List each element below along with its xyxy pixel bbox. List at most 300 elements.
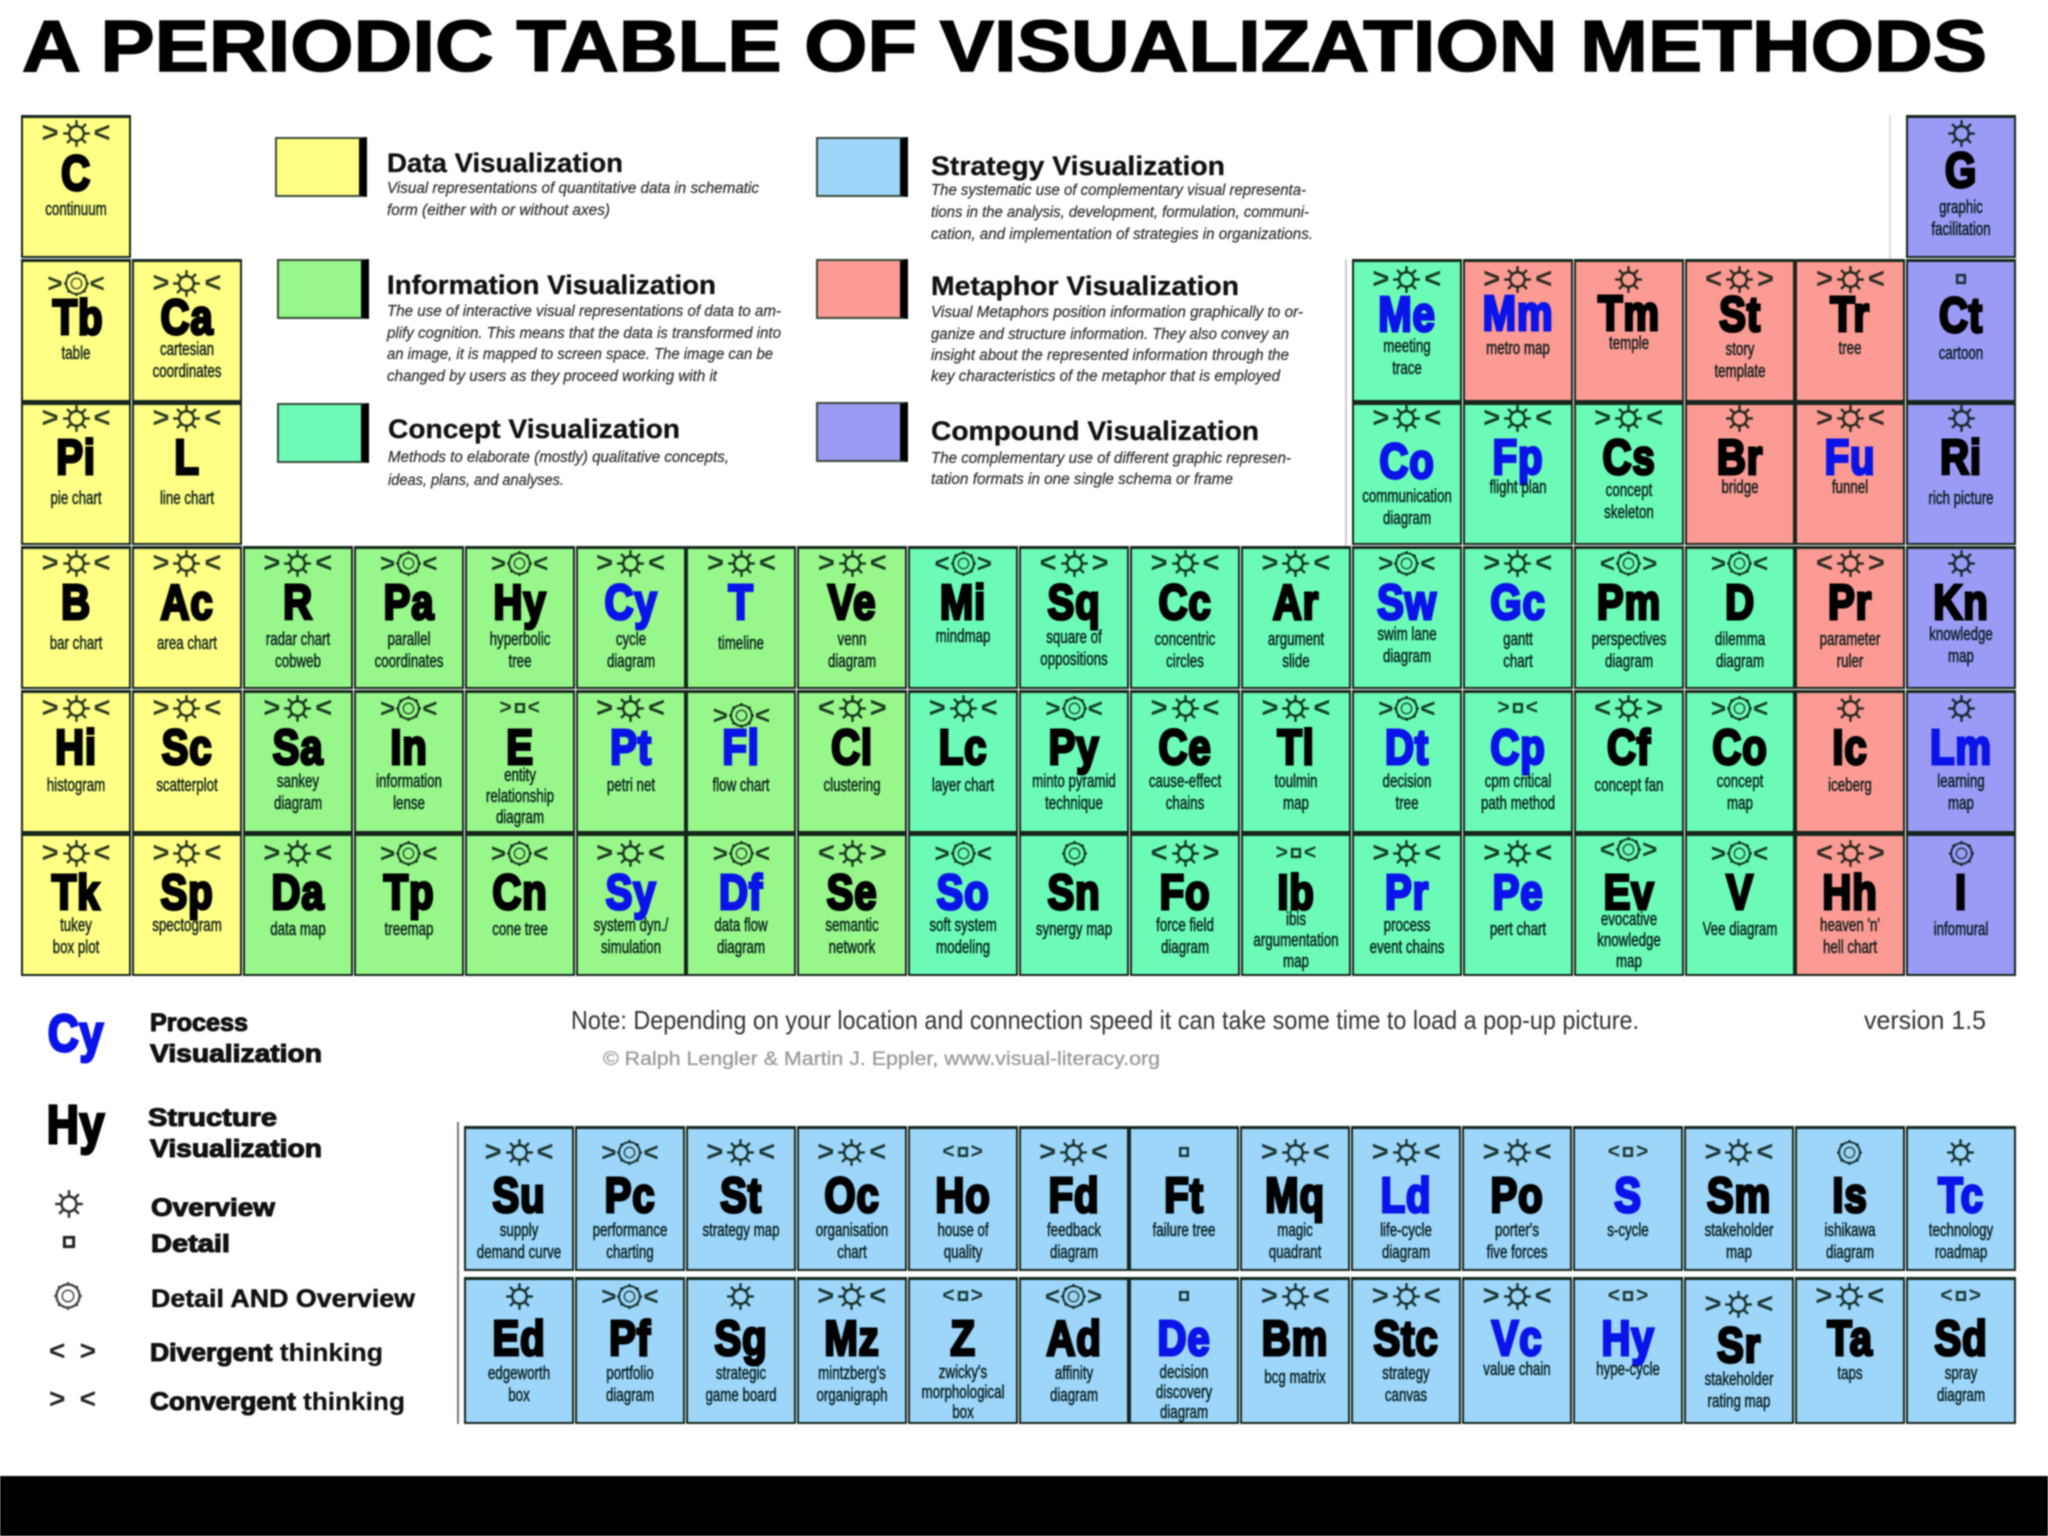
cell: Stc strategy canvas: canvas [1385,1385,1427,1405]
cell: Sr stakeholder rating map: > < [1704,1288,1773,1320]
cell: Sq square of oppositions: < > [1040,547,1109,579]
cell: Fu funnel [1795,402,1905,545]
cell: St story template: < > [1705,263,1774,295]
cell: Ib ibis argumentation map: Ib [1277,866,1315,920]
cell: Ic iceberg [1795,690,1905,833]
cell: Dt decision tree: > < [1378,693,1435,723]
cell: Tr tree: Tr [1831,288,1870,342]
legend text: information visualization: plify cognition. This means that the data is transformed into [386,325,781,342]
cell: I infomural: infomural [1934,919,1989,939]
cell: Ct cartoon: cartoon [1939,343,1984,363]
cell: Sr stakeholder rating map: rating map [1707,1391,1770,1411]
cell: St story template: story [1725,339,1754,359]
cell: Ft failure tree [1129,1126,1239,1271]
cell: Me meeting trace: meeting [1383,336,1430,356]
cell: Cs concept skeleton [1574,402,1684,545]
cell: Pm perspectives diagram: Pm [1596,576,1661,630]
cell: Z zwicky's morphological box: < > [942,1284,983,1307]
cell: Tl toulmin map [1241,690,1351,833]
cell: Gc gantt chart: chart [1503,651,1532,671]
cell: Sd spray diagram: diagram [1937,1385,1985,1405]
cell: Kn knowledge map: Kn [1934,576,1989,630]
cell: Mm metro map [1463,259,1573,402]
cell: Pf portfolio diagram [575,1277,685,1424]
cell: Sm stakeholder map [1684,1126,1794,1271]
cell: De decision discovery diagram [1129,1277,1239,1424]
cell: Sc scatterplot: > < [152,692,221,724]
cell: Fl flow chart: flow chart [713,775,770,795]
cell: Cc concentric circles: circles [1166,651,1204,671]
cell: Bm bcg matrix: Bm [1262,1312,1328,1366]
cell: Ad affinity diagram: diagram [1049,1385,1098,1405]
cell: Sa sankey diagram: > < [263,692,332,724]
cell: Ta taps [1795,1277,1905,1424]
cell: Ar argument slide: Ar [1273,576,1319,630]
cell: Oc organisation chart: > < [817,1136,886,1168]
cell: Py minto pyramid technique: technique [1045,793,1103,813]
cell: L line chart [132,402,242,545]
cell: Sy system dyn. simulation: > < [596,837,665,869]
cell: Hi histogram: > < [42,692,110,724]
cell: Pa parallel coordinates: > < [380,548,437,578]
cell: So soft system modeling: soft system [930,915,997,935]
cell: Ca cartesian coordinates: Ca [160,291,213,345]
cell: G graphic facilitation: G [1945,144,1977,198]
key: divergent thinking arrows: < > [49,1335,96,1366]
legend text: metaphor visualization: Visual Metaphors position information graphically to or- [931,304,1303,321]
cell: Co communication diagram: Co [1379,435,1434,489]
cell: Mz mintzberg's organigraph: organigraph [816,1385,887,1405]
cell: Vc value chain: value chain [1483,1359,1551,1379]
cell: Z zwicky's morphological box: morphological [921,1382,1004,1402]
cell: Ho house of quality: house of [937,1220,988,1240]
cell: L line chart: L [174,431,200,485]
cell: Ad affinity diagram: < > [1045,1281,1102,1311]
cell: Dt decision tree: tree [1395,793,1418,813]
cell: C continuum: continuum [45,199,107,219]
cell: Ce cause-effect chains: > < [1151,692,1219,724]
cell: Tm temple: Tm [1598,287,1660,341]
cell: Gc gantt chart: gantt [1503,629,1532,649]
cell: Hh heaven n hell chart: heaven 'n' [1820,915,1880,935]
cell: So soft system modeling: > < [934,838,992,868]
cell: Me meeting trace: > < [1372,263,1441,295]
cell: Vc value chain [1462,1277,1572,1424]
cell: Mi mindmap: mindmap [936,626,991,646]
icon: detail and overview [53,1281,83,1311]
cell: Bm bcg matrix: > < [1261,1280,1330,1312]
legend text: strategy visualization: The systematic use of complementary visual representa- [931,182,1306,199]
cell: Mq magic quadrant [1240,1126,1350,1271]
cell: Ca cartesian coordinates [132,259,242,402]
cell: Hi histogram: Hi [55,721,97,775]
cell: Cs concept skeleton: Cs [1602,431,1655,485]
legend text: information visualization: changed by users as they proceed working with it [387,368,718,385]
cell: Tk tukey box plot: Tk [52,866,100,920]
cell: Se semantic network: network [829,937,876,957]
cell: Po porter's five forces: porter's [1495,1220,1539,1240]
cell: Z zwicky's morphological box: Z [950,1312,975,1366]
cell: Dt decision tree: decision [1382,771,1431,791]
cell: Pt petri net: petri net [606,775,655,795]
cell: S s-cycle [1573,1126,1683,1271]
cell: Ac area chart [132,546,242,689]
cell: B bar chart: B [61,576,91,630]
cell: Sy system dyn. simulation [576,833,686,976]
cell: Ar argument slide [1241,546,1351,689]
cell: De decision discovery diagram: diagram [1160,1402,1208,1422]
cell: Fp flight plan: Fp [1492,431,1543,485]
cell: Su supply demand curve: demand curve [477,1242,561,1262]
key: detail and overview: Detail AND Overview [151,1285,416,1313]
key: structure visualization: Visualization [150,1135,322,1163]
cell: Fp flight plan: flight plan [1489,477,1546,497]
cell: Me meeting trace [1352,259,1462,402]
cell: Sm stakeholder map: > < [1704,1136,1773,1168]
cell: Tk tukey box plot: > < [42,837,110,869]
cell: Mi mindmap [908,546,1018,689]
cell: St story template [1684,259,1794,402]
cell: Po porter's five forces [1462,1126,1572,1271]
cell: Mm metro map: > < [1483,263,1552,295]
cell: Stc strategy canvas: strategy [1382,1363,1430,1383]
cell: Co communication diagram: communication [1362,486,1452,506]
cell: B bar chart: > < [42,547,110,579]
cell: Fp flight plan: > < [1483,402,1552,434]
cell: Co communication diagram [1352,402,1462,545]
cell: Ct cartoon: Ct [1939,289,1983,343]
cell: Gc gantt chart: Gc [1490,576,1545,630]
cell: Fd feedback diagram [1018,1126,1128,1271]
cell: Sn synergy map: Sn [1048,866,1101,920]
black bottom band [0,1476,2048,1536]
cell: De decision discovery diagram: discovery [1156,1382,1213,1402]
cell: Sa sankey diagram: Sa [272,721,323,775]
cell: Sa sankey diagram: sankey [277,771,319,791]
cell: Se semantic network: Se [827,866,878,920]
cell: Ld life-cycle diagram: > < [1372,1136,1441,1168]
cell: Hy hype-cycle: Hy [1601,1312,1654,1366]
cell: Pm perspectives diagram: diagram [1605,651,1653,671]
cell: Ce cause-effect chains: cause-effect [1149,771,1221,791]
cell: Ca cartesian coordinates: cartesian [160,339,214,359]
cell: Br bridge: Br [1716,431,1763,485]
cell: Lm learning map: learning [1938,771,1985,791]
cell: Ta taps: Ta [1827,1312,1873,1366]
legend text: data visualization: Data Visualization [387,148,623,178]
cell: Df data flow diagram [686,833,796,976]
legend text: metaphor visualization: key characteristics of the metaphor that is employed [931,368,1281,385]
legend text: data visualization: Visual representations of quantitative data in schematic [387,180,759,197]
swatch: concept visualization [277,403,369,463]
cell: Pt petri net: Pt [610,721,651,775]
cell: Oc organisation chart [797,1126,907,1271]
cell: Cn cone tree [465,833,575,976]
legend text: compound visualization: tation formats in one single schema or frame [931,471,1233,488]
cell: Tr tree: tree [1839,338,1862,358]
cell: St strategy map: St [720,1169,762,1223]
cell: St story template: template [1714,361,1765,381]
cell: Sq square of oppositions: square of [1046,627,1102,647]
cell: Ed edgeworth box: Ed [493,1312,545,1366]
cell: Fd feedback diagram: feedback [1046,1220,1101,1240]
cell: Vc value chain: Vc [1492,1312,1542,1366]
cell: Ca cartesian coordinates: > < [152,267,221,299]
cell: Ce cause-effect chains: chains [1166,793,1204,813]
cell: Ac area chart: > < [152,547,221,579]
category legend: swatches and descriptions [274,136,910,464]
cell: Fd feedback diagram: Fd [1048,1169,1099,1223]
cell: Bm bcg matrix: bcg matrix [1265,1367,1326,1387]
cell: Co concept map [1684,690,1794,833]
cell: Fo force field diagram [1130,833,1240,976]
cell: Stc strategy canvas: > < [1372,1280,1441,1312]
cell: In information lense: > < [380,693,437,723]
cell: Ca cartesian coordinates: coordinates [152,361,221,381]
cell: Stc strategy canvas: Stc [1374,1312,1439,1366]
cell: Fu funnel: Fu [1825,431,1876,485]
key: convergent thinking arrows: > < [49,1383,96,1414]
cell: Ho house of quality: < > [942,1140,983,1163]
cell: Sy system dyn. simulation: Sy [605,866,656,920]
legend text: concept visualization: Concept Visualization [388,414,680,444]
cell: Sn synergy map [1019,833,1129,976]
cell: Tc technology roadmap: technology [1928,1220,1993,1240]
cell: C continuum: C [61,147,91,201]
cell: Kn knowledge map: knowledge [1929,624,1993,644]
cell: Lm learning map: Lm [1930,721,1992,775]
title: A PERIODIC TABLE OF VISUALIZATION METHODS [22,7,1987,87]
cell: Mm metro map: Mm [1482,287,1553,341]
cell: G graphic facilitation: graphic [1939,197,1983,217]
cell: Mm metro map: metro map [1486,338,1550,358]
cell: Mz mintzberg's organigraph [797,1277,907,1424]
cell: V Vee diagram: > < [1711,838,1768,868]
cell: Cp cpm critical path method: path method [1481,793,1555,813]
cell: St strategy map: > < [706,1136,775,1168]
key symbol: Cy process: Cy [48,1005,104,1063]
cell: Pr process event chains: Pr [1385,866,1429,920]
cell: S s-cycle: s-cycle [1607,1220,1649,1240]
cell: Pa parallel coordinates: Pa [383,576,434,630]
cell: Sw swim lane diagram [1352,546,1462,689]
cell: S s-cycle: S [1614,1169,1642,1223]
cell: Tp treemap: Tp [383,866,434,920]
cell: Tc technology roadmap: Tc [1938,1169,1983,1223]
cell: Fd feedback diagram: > < [1039,1136,1108,1168]
note: Note: Depending on your location and connection speed it can take some time to load a pop-up picture. [571,1005,1639,1035]
cell: Pm perspectives diagram: < > [1600,548,1657,578]
cell: Tp treemap: treemap [384,919,433,939]
cell: Cy cycle diagram: Cy [604,576,657,630]
cell: Tp treemap [354,833,464,976]
cell: Pr process event chains: event chains [1369,937,1444,957]
cell: Ve venn diagram: > < [818,547,887,579]
key: divergent thinking: Divergent thinking [150,1339,383,1367]
cell: In information lense: In [390,721,427,775]
cell: Hy hyperbolic tree [465,546,575,689]
cell: Cn cone tree: Cn [492,866,547,920]
cell: Pr parameter ruler: parameter [1820,629,1881,649]
cell: Dt decision tree: Dt [1385,721,1429,775]
cell: Pr parameter ruler: ruler [1837,651,1864,671]
cell: Py minto pyramid technique: Py [1049,721,1099,775]
cell: Pe pert chart: pert chart [1490,919,1546,939]
cell: Ri rich picture: Ri [1940,431,1982,485]
cell: Ev evocative knowledge map: evocative [1600,909,1657,929]
cell: Ev evocative knowledge map: Ev [1603,866,1654,920]
cell: Sy system dyn. simulation: system dyn./ [593,915,668,935]
cell: Hh heaven n hell chart: < > [1816,837,1885,869]
cell: Sm stakeholder map: Sm [1707,1169,1771,1223]
legend text: strategy visualization: tions in the analysis, development, formulation, communi- [931,204,1309,221]
cell: Ib ibis argumentation map: map [1283,951,1309,971]
cell: Br bridge: bridge [1721,477,1758,497]
legend text: metaphor visualization [931,271,1303,385]
cell: Co concept map: concept [1716,771,1763,791]
cell: Is ishikawa diagram [1795,1126,1905,1271]
cell: Cl clustering: clustering [824,775,881,795]
cell: Ho house of quality: quality [943,1242,982,1262]
cell: Fo force field diagram: Fo [1160,866,1210,920]
cell: Pc performance charting: > < [601,1137,659,1167]
cell: Pr process event chains: process [1383,915,1430,935]
cell: Co concept map: Co [1712,721,1767,775]
key: structure visualization [148,1104,322,1163]
cell: Fu funnel: > < [1816,402,1885,434]
cell: In information lense: information [376,771,442,791]
cell: Tl toulmin map: toulmin [1274,771,1317,791]
cell: Ce cause-effect chains [1130,690,1240,833]
cell: R radar chart cobweb: radar chart [266,629,330,649]
cell: Vc value chain: > < [1483,1280,1552,1312]
cell: Tc technology roadmap: roadmap [1934,1242,1987,1262]
cell: R radar chart cobweb: > < [263,547,332,579]
cell: Cn cone tree: cone tree [492,919,547,939]
cell: Sd spray diagram: < > [1940,1284,1981,1307]
cell: I infomural: I [1955,866,1967,920]
cell: Sw swim lane diagram: > < [1378,548,1435,578]
cell: Z zwicky's morphological box: box [952,1402,973,1422]
cell: Tr tree [1795,259,1905,402]
cell: S s-cycle: < > [1608,1140,1648,1163]
legend text: metaphor visualization: ganize and structure information. They also convey an [931,326,1289,343]
cell: Cf concept fan [1574,690,1684,833]
cell: Lc layer chart: > < [929,692,998,724]
cell: Oc organisation chart: Oc [824,1169,879,1223]
cell: Cc concentric circles: > < [1151,547,1219,579]
cell: R radar chart cobweb [243,546,353,689]
cell: Cl clustering [797,690,907,833]
cell: Sg strategic game board [686,1277,796,1424]
swatch: data visualization [275,137,367,197]
cell: T timeline [686,546,796,689]
cell: Kn knowledge map [1906,546,2016,689]
cell: Ic iceberg: iceberg [1829,775,1872,795]
strategy table [462,1124,2018,1426]
cell: Ft failure tree: Ft [1165,1169,1204,1223]
cell: Pf portfolio diagram: diagram [606,1385,654,1405]
cell: V Vee diagram [1684,833,1794,976]
cell: Su supply demand curve [464,1126,574,1271]
cell: Sr stakeholder rating map [1684,1277,1794,1424]
cell: Me meeting trace: Me [1378,288,1436,342]
cell: Hy hype-cycle: < > [1608,1284,1648,1307]
key: process visualization: Process [150,1009,248,1037]
cell: Ld life-cycle diagram: diagram [1382,1242,1430,1262]
cell: Pe pert chart: Pe [1492,866,1543,920]
cell: Mq magic quadrant: > < [1261,1136,1330,1168]
legend text: information visualization [386,270,781,385]
swatch: compound visualization [816,402,908,462]
cell: Oc organisation chart: chart [837,1242,866,1262]
cell: Pc performance charting: performance [592,1220,667,1240]
legend text: concept visualization: ideas, plans, and analyses. [388,472,564,489]
cell: Ho house of quality [908,1126,1018,1271]
cell: Tl toulmin map: Tl [1277,721,1315,775]
cell: Da data map: data map [270,919,326,939]
cell: Ed edgeworth box: box [508,1385,530,1405]
cell: Cp cpm critical path method: Cp [1490,721,1545,775]
cell: Sa sankey diagram [243,690,353,833]
legend text: compound visualization: Compound Visualization [931,416,1259,446]
cell: Lc layer chart: layer chart [932,775,994,795]
cell: Sm stakeholder map: map [1726,1242,1752,1262]
cell: Da data map: Da [271,866,324,920]
cell: Ev evocative knowledge map: map [1616,951,1642,971]
cell: Cy cycle diagram: diagram [606,651,655,671]
cell: B bar chart: bar chart [50,633,102,653]
cell: Ed edgeworth box: edgeworth [488,1363,550,1383]
cell: Co concept map: > < [1711,693,1768,723]
cell: Sd spray diagram: Sd [1934,1312,1987,1366]
cell: Sd spray diagram: spray [1944,1363,1977,1383]
legend text: metaphor visualization: insight about the represented information through the [931,347,1289,364]
cell: L line chart: line chart [160,488,214,508]
cell: Su supply demand curve: supply [500,1220,538,1240]
legend text: compound visualization: The complementary use of different graphic represen- [931,450,1291,467]
cell: Mz mintzberg's organigraph: > < [817,1280,886,1312]
cell: Lm learning map [1906,690,2016,833]
cell: Df data flow diagram: data flow [715,915,768,935]
cell: Pr parameter ruler: < > [1816,547,1885,579]
cell: Cp cpm critical path method [1463,690,1573,833]
cell: Pe pert chart: > < [1483,837,1552,869]
cell: Hy hyperbolic tree: > < [491,548,548,578]
legend text: information visualization: The use of interactive visual representations of data to am- [387,303,781,320]
cell: Stc strategy canvas [1351,1277,1461,1424]
cell: Sp spectogram: > < [152,837,221,869]
legend text: strategy visualization: cation, and implementation of strategies in organizations. [931,226,1313,243]
cell: Z zwicky's morphological box: zwicky's [938,1362,987,1382]
cell: E entity relationship diagram: E [506,721,533,775]
cell: Ft failure tree: failure tree [1153,1220,1216,1240]
key: overview: Overview [151,1194,276,1222]
legend text: concept visualization: Methods to elaborate (mostly) qualitative concepts, [388,449,729,466]
cell: Is ishikawa diagram: diagram [1826,1242,1874,1262]
cell: Sg strategic game board: Sg [714,1312,767,1366]
legend text: strategy visualization [931,151,1313,243]
cell: Ta taps: taps [1837,1363,1862,1383]
cell: Ld life-cycle diagram: Ld [1381,1169,1432,1223]
cell: D dilemma diagram [1684,546,1794,689]
cell: Ib ibis argumentation map: argumentation [1253,930,1338,950]
cell: Ib ibis argumentation map: > < [1276,841,1316,864]
cell: Is ishikawa diagram: ishikawa [1824,1220,1875,1240]
cell: E entity relationship diagram: relationship [486,786,554,806]
cell: Ve venn diagram: Ve [828,576,877,630]
cell: Pc performance charting [575,1126,685,1271]
